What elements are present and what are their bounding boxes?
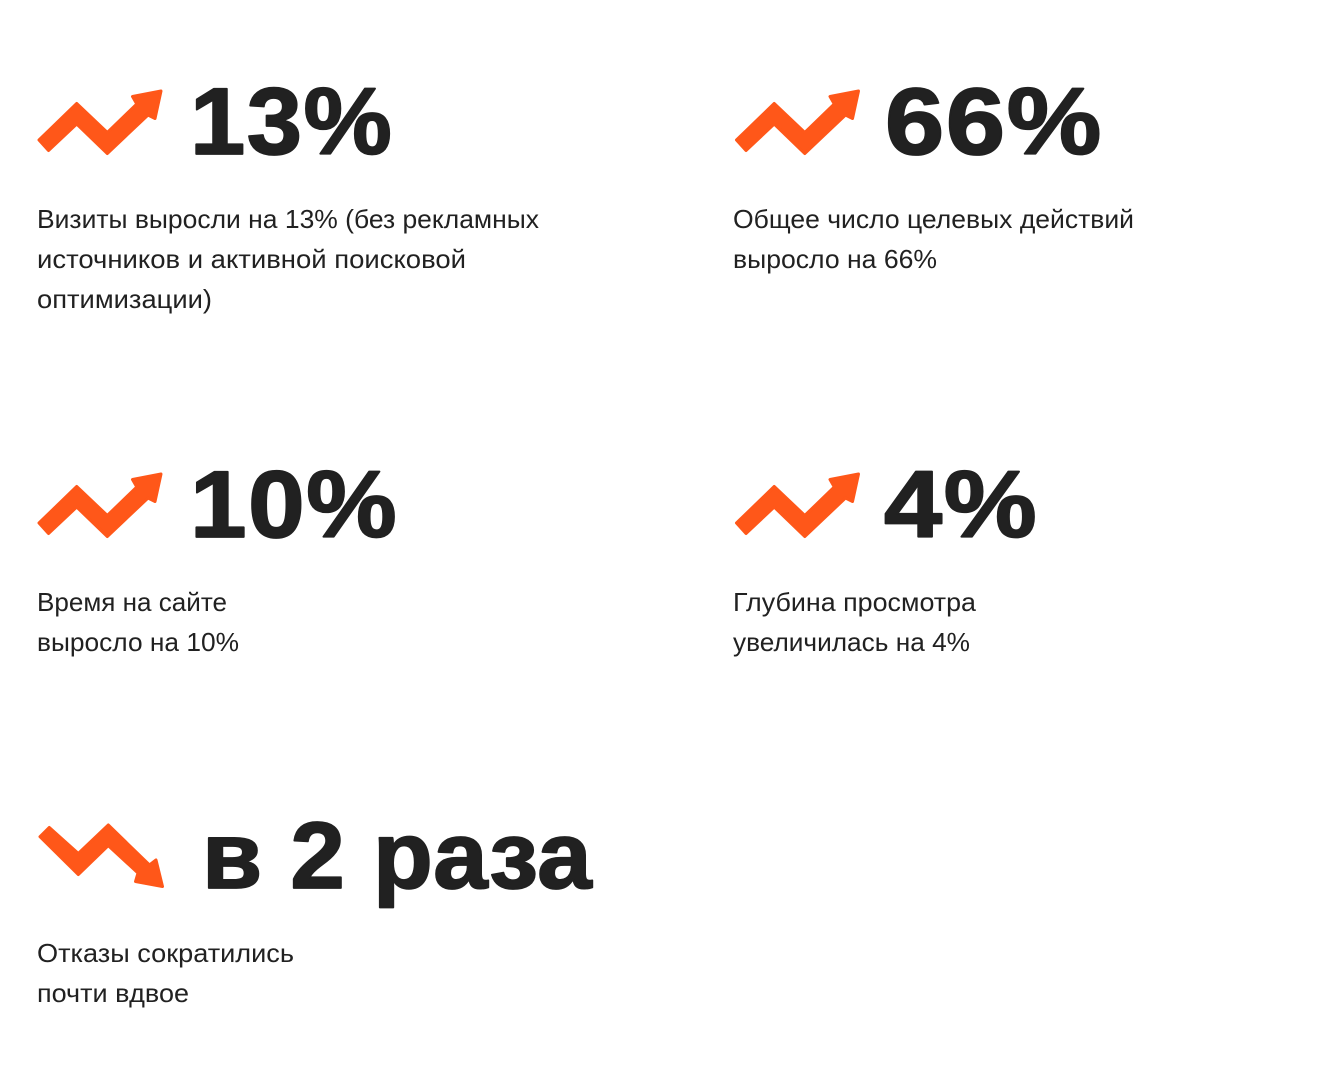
number: в 2 раза: в 2 раза: [202, 803, 593, 909]
description: time on site: [37, 587, 239, 657]
description: visits: источников и активной поисковой: [37, 244, 466, 274]
icon: arrow up: [736, 474, 858, 536]
number: 4%: 4%: [884, 452, 1038, 558]
description: time on site: Время на сайте: [37, 587, 227, 617]
description: bounce rate: почти вдвое: [37, 978, 189, 1008]
number: 10%: 10%: [190, 451, 398, 557]
icon: arrow up: [736, 91, 858, 154]
description: depth: [733, 587, 977, 657]
number: 66%: 66%: [885, 69, 1103, 175]
description: depth: увеличилась на 4%: [733, 627, 970, 657]
description: time on site: выросло на 10%: [37, 627, 239, 657]
description: visits: оптимизации): [37, 284, 212, 314]
description: target actions: [733, 204, 1134, 274]
stat block: time on site 10%: [37, 451, 398, 657]
stat block: target actions 66%: [733, 69, 1134, 274]
description: depth: Глубина просмотра: [733, 587, 977, 617]
description: target actions: Общее число целевых действий: [733, 204, 1134, 234]
description: visits: Визиты выросли на 13% (без рекламных: [37, 204, 539, 234]
description: visits: [37, 204, 539, 314]
description: target actions: выросло на 66%: [733, 244, 937, 274]
icon: arrow down: [40, 825, 162, 886]
stat block: visits 13%: [37, 68, 539, 314]
stat block: depth 4%: [733, 452, 1038, 657]
icon: arrow up: [39, 474, 161, 536]
number: 13%: 13%: [190, 68, 393, 175]
stat block: bounce rate halved: [37, 803, 593, 1008]
description: bounce rate: Отказы сократились: [37, 938, 294, 968]
description: bounce rate: [37, 938, 294, 1008]
icon: arrow up: [39, 91, 161, 154]
